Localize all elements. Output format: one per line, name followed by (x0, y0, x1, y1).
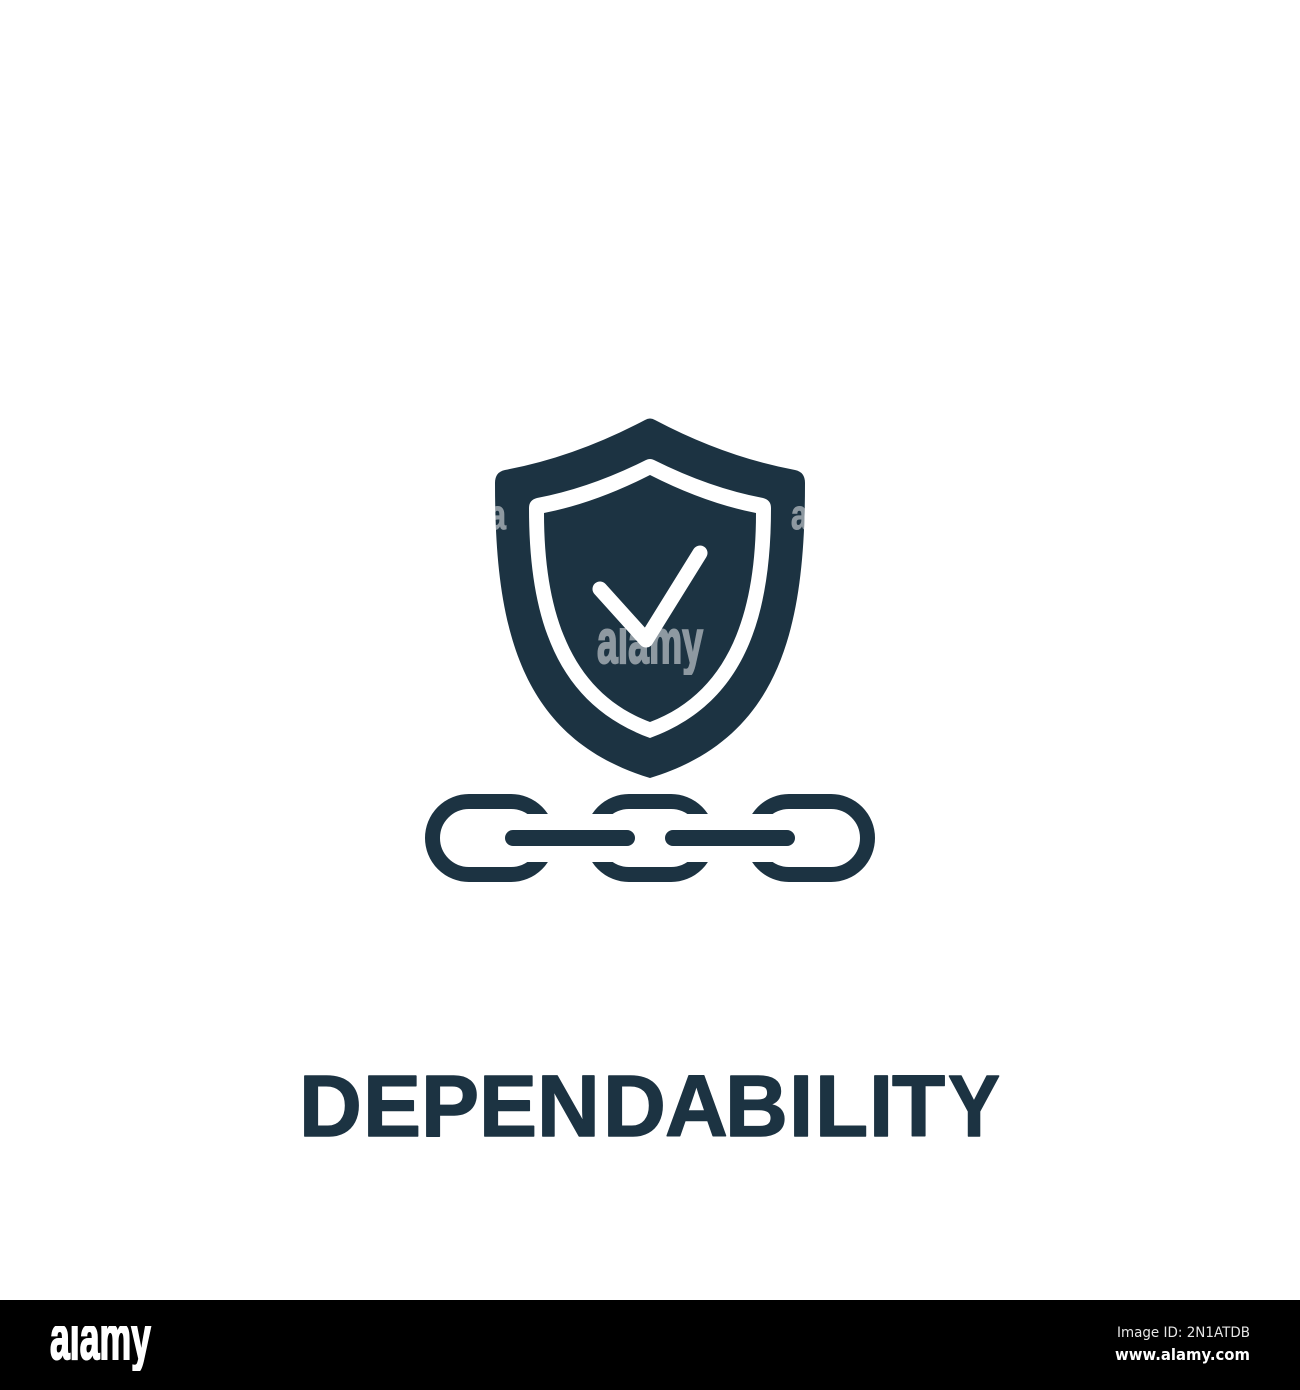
check mark (600, 553, 700, 640)
footer bar (0, 1300, 1300, 1390)
infographic canvas (0, 418, 1300, 1390)
title: Y (948, 1058, 1000, 1155)
chain link right (752, 802, 868, 874)
chain bar left (505, 830, 635, 846)
watermark: clipped side letters: a (791, 491, 808, 538)
website: www.alamy.com (1115, 1345, 1250, 1364)
chain link middle (592, 802, 708, 874)
icon: shield with check mark (489, 418, 808, 778)
watermark: clipped side letters: a (489, 491, 506, 538)
shield outer body (495, 418, 805, 778)
footer logo: alamy (50, 1304, 151, 1373)
image id: Image ID: 2N1ATDB (1117, 1325, 1250, 1341)
shield white inner band (529, 459, 771, 738)
title: DEPENDABILIT (299, 1058, 945, 1155)
icon: chain (432, 802, 868, 874)
chain bar right (665, 830, 795, 846)
watermark: alamy centre: alamy (597, 608, 703, 677)
chain link left (432, 802, 548, 874)
watermark: clipped side letters (495, 506, 805, 530)
